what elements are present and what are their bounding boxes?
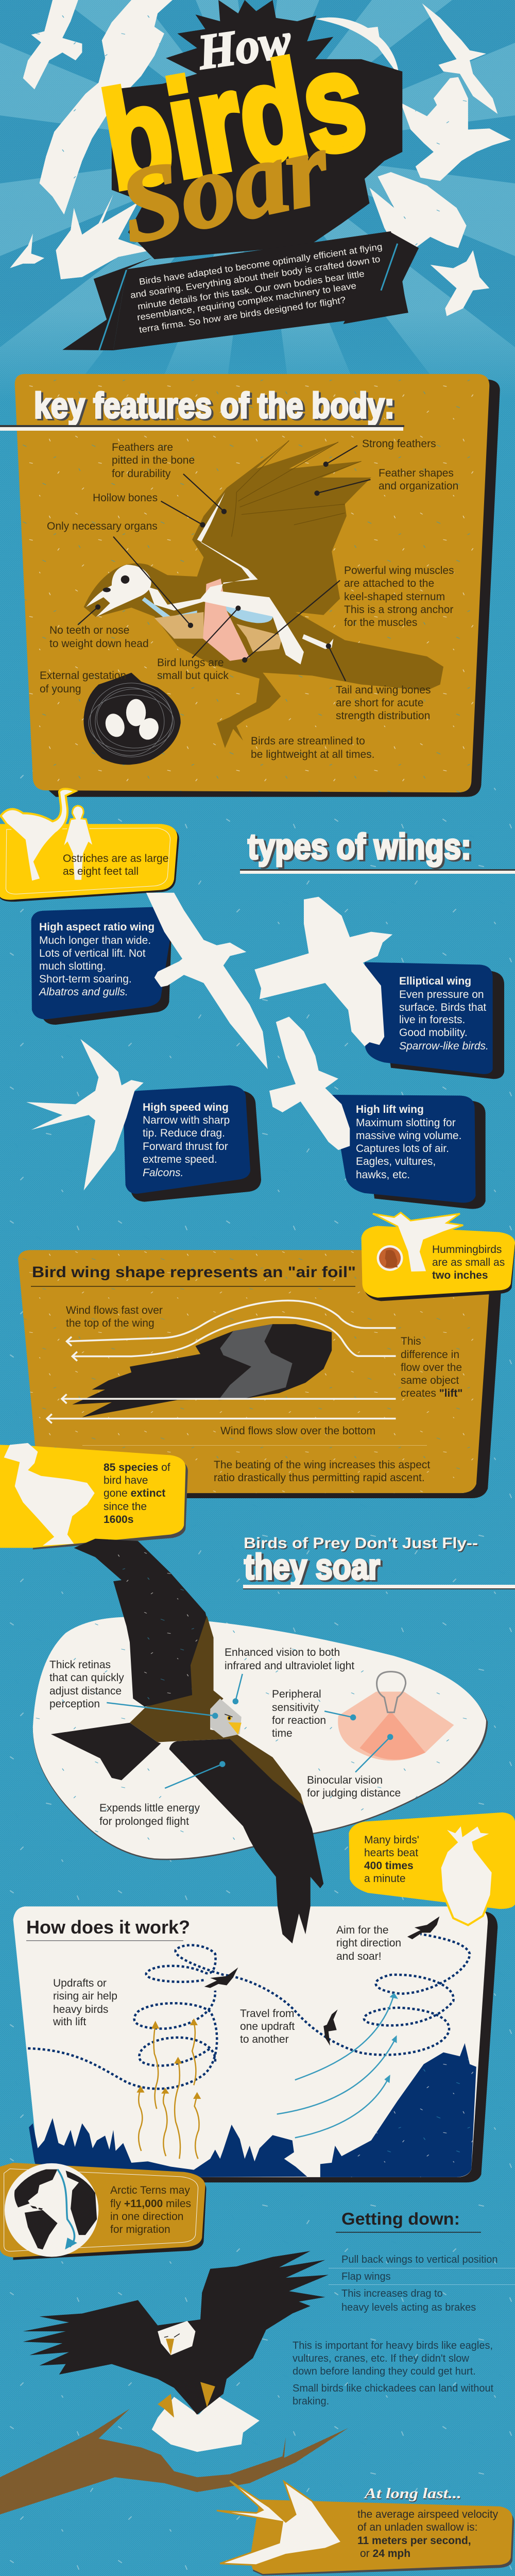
panel: getting down: heavy levels acting as brakes <box>341 2302 476 2313</box>
labels: The beating of the wing increases this aspect <box>214 1459 430 1471</box>
icon: nest with eggs <box>83 673 181 765</box>
labels: Aim for the <box>336 1924 389 1936</box>
heading: types of wings: types of wings: <box>248 826 471 867</box>
labels: ratio drastically thus permitting rapid ascent. <box>214 1472 425 1484</box>
panel: high speed wing: Narrow with sharp <box>143 1114 230 1126</box>
panel: high aspect ratio wing: Much longer than wide. <box>39 935 151 946</box>
labels: Wind flows slow over the bottom <box>220 1425 375 1437</box>
labels: perception <box>49 1698 100 1710</box>
panel: high lift wing: Captures lots of air. <box>356 1143 449 1155</box>
heading: Bird wing shape represents an "air foil" <box>32 1264 356 1281</box>
labels: pitted in the bone <box>112 454 195 466</box>
illustration: bird anatomy <box>84 440 443 748</box>
labels <box>53 1924 401 2045</box>
callout: dodo extinct species <box>0 1443 188 1550</box>
labels: Birds are streamlined to <box>251 735 365 747</box>
labels: the top of the wing <box>66 1317 154 1329</box>
labels: for prolonged flight <box>99 1816 189 1827</box>
icon: dodo <box>4 1443 95 1546</box>
ribbon: intro text: Birds have adapted to become optimally efficient at flying <box>139 241 383 287</box>
labels: infrared and ultraviolet light <box>225 1660 354 1672</box>
labels: creates "lift" <box>401 1387 462 1399</box>
labels <box>49 1647 401 1827</box>
panel: high lift wing: High lift wing <box>356 1104 424 1115</box>
ribbon: intro text <box>62 231 419 350</box>
callout: ostriches: as eight feet tall <box>63 866 139 877</box>
heading: birds of prey: they soar <box>244 1547 380 1587</box>
icon: vision cones <box>338 1691 454 1760</box>
sparrow-like bird <box>254 897 392 1046</box>
panel: elliptical wing: Even pressure on <box>399 989 484 1001</box>
callout: dodo extinct species: gone extinct <box>104 1487 165 1499</box>
ribbon: intro text: and soaring. Everything about their body is crafted down to <box>130 253 381 300</box>
small black birds <box>204 1917 439 2046</box>
labels: Feathers are <box>112 442 173 453</box>
panel: getting down <box>293 2209 515 2407</box>
callout: arctic terns: for migration <box>110 2224 170 2235</box>
labels: heavy birds <box>53 2004 108 2015</box>
panel: elliptical wing: surface. Birds that <box>399 1002 486 1013</box>
callout: hummingbirds <box>362 1213 515 1301</box>
heading: Getting down: <box>341 2209 460 2228</box>
labels: Bird lungs are <box>157 657 224 669</box>
heading: key features of the body: <box>34 385 394 426</box>
labels <box>66 1304 462 1484</box>
labels: adjust distance <box>49 1685 122 1697</box>
pointer lines <box>78 446 370 681</box>
labels: that can quickly <box>49 1672 124 1684</box>
high lift bird <box>269 1016 350 1150</box>
labels: Enhanced vision to both <box>225 1647 340 1658</box>
labels: and soar! <box>336 1951 382 1962</box>
panel: high aspect ratio wing: Albatros and gulls. <box>38 986 128 998</box>
panel: elliptical wing: Sparrow-like birds. <box>399 1040 489 1052</box>
heading: How does it work? <box>26 1917 190 1938</box>
ribbon: intro text: resemblance, requiring complex machinery to leave <box>136 280 357 323</box>
labels: Peripheral <box>272 1688 321 1700</box>
title: How birds Soar <box>93 0 402 266</box>
panel: high lift wing: Eagles, vultures, <box>356 1156 436 1167</box>
callout: arctic terns <box>0 2163 207 2260</box>
labels: to another <box>240 2033 289 2045</box>
landscape: trees and cliff <box>29 2118 307 2177</box>
panel: key features of the body <box>0 374 500 797</box>
illustration: tree branch <box>0 2409 348 2514</box>
callout: arctic terns: Arctic Terns may <box>110 2184 190 2196</box>
title word: birds: birds <box>93 22 375 218</box>
callout: arctic terns: fly +11,000 miles <box>110 2198 191 2210</box>
illustration: landing eagle <box>23 2251 329 2452</box>
labels: are attached to the <box>344 578 434 589</box>
pointer lines: senses <box>107 1674 393 1788</box>
panel: getting down: Small birds like chickadees can land without <box>293 2383 494 2394</box>
labels: time <box>272 1727 293 1739</box>
labels: Feather shapes <box>379 467 454 479</box>
albatross <box>146 893 268 1069</box>
icon: swallow <box>217 2481 341 2565</box>
callout: ostriches <box>0 789 179 902</box>
labels: difference in <box>401 1349 459 1361</box>
callout: heart rate: 400 times <box>364 1860 414 1872</box>
panel: getting down: down before landing they could get hurt. <box>293 2366 476 2377</box>
panel: high speed wing: tip. Reduce drag. <box>143 1127 225 1139</box>
panel: how does it work <box>13 1906 497 2182</box>
labels: one updraft <box>240 2021 295 2032</box>
ribbon: intro text: minute details for this task. Our own bodies bear little <box>137 268 365 312</box>
labels: This <box>401 1335 421 1347</box>
icon: globe with migration route <box>5 2163 98 2257</box>
rising updraft arrows <box>139 2022 199 2159</box>
title backdrop: black crown and block shadow <box>112 0 402 259</box>
labels: Hollow bones <box>93 492 158 504</box>
callout: dodo extinct species: 85 species of <box>104 1462 170 1473</box>
labels: flow over the <box>401 1362 462 1374</box>
labels: External gestation <box>40 670 126 682</box>
labels: Wind flows fast over <box>66 1304 163 1316</box>
panel: air foil <box>18 1250 501 1498</box>
labels: Expends little energy <box>99 1802 200 1814</box>
callout: dodo extinct species: since the <box>104 1501 147 1513</box>
labels: Only necessary organs <box>47 520 158 532</box>
panel: high lift wing: massive wing volume. <box>356 1130 461 1142</box>
panel: getting down: braking. <box>293 2396 329 2407</box>
labels: Powerful wing muscles <box>344 565 454 577</box>
panel: high aspect ratio wing: Lots of vertical lift. Not <box>39 947 146 959</box>
labels: and organization <box>379 480 458 492</box>
callout: dodo extinct species: 1600s <box>104 1514 133 1526</box>
falcon swallow shape <box>26 1039 144 1191</box>
panel: bird of prey senses <box>33 1617 488 1860</box>
labels: Strong feathers <box>362 438 436 450</box>
labels: to weight down head <box>49 638 149 650</box>
callout: hummingbirds: are as small as <box>432 1257 505 1268</box>
panel: high aspect ratio wing: Short-term soaring. <box>39 973 132 985</box>
callout: dodo extinct species: bird have <box>104 1475 148 1486</box>
labels: same object <box>401 1375 459 1386</box>
panel: elliptical wing: Good mobility. <box>399 1027 468 1039</box>
panel: elliptical wing: Elliptical wing <box>399 975 471 987</box>
labels: Binocular vision <box>307 1774 383 1786</box>
labels: of young <box>40 683 81 695</box>
panel: high speed wing: Falcons. <box>143 1167 183 1179</box>
labels: are short for acute <box>336 697 423 709</box>
panel: getting down: This is important for heavy birds like eagles, <box>293 2340 493 2351</box>
callout: at long last swallow: At long last... <box>364 2485 461 2502</box>
callout: heart rate: Many birds' <box>364 1834 419 1846</box>
illustration: wing cross-section <box>72 1324 332 1417</box>
panel: high speed wing: Forward thrust for <box>143 1141 228 1153</box>
callout: heart rate: a minute <box>364 1873 406 1885</box>
callout: hummingbirds: Hummingbirds <box>432 1244 502 1256</box>
panel: high aspect ratio wing: much slotting. <box>39 960 106 972</box>
panel background <box>15 374 500 797</box>
callout: hummingbirds: two inches <box>432 1269 488 1281</box>
panel: elliptical wing <box>365 962 504 1079</box>
labels: small but quick <box>157 670 229 682</box>
panel: high aspect ratio wing <box>31 907 171 1025</box>
labels: for judging distance <box>307 1787 401 1799</box>
panel: high speed wing <box>123 1086 261 1202</box>
icon: heart <box>440 1824 493 1925</box>
labels: for durability <box>112 468 171 480</box>
callout: ostriches: Ostriches are as large <box>63 853 168 865</box>
decorative white bird silhouettes <box>10 0 511 316</box>
panel: getting down: Flap wings <box>341 2271 391 2282</box>
callout: heart rate <box>349 1812 515 1925</box>
panel: getting down: This increases drag to <box>341 2288 443 2299</box>
panel: high speed wing: extreme speed. <box>143 1154 217 1165</box>
callout: heart rate: hearts beat <box>364 1847 418 1859</box>
illustration: soaring eagle <box>51 1539 323 1943</box>
labels: This is a strong anchor <box>344 604 453 616</box>
airflow lines and arrows <box>47 1300 396 1423</box>
icon: penny <box>377 1245 403 1271</box>
wind arrows <box>277 1997 395 2138</box>
labels: No teeth or nose <box>49 624 129 636</box>
heading: birds of prey: Birds of Prey Don't Just Fly-- <box>244 1535 478 1552</box>
labels: keel-shaped sternum <box>344 591 445 603</box>
labels: for reaction <box>272 1715 326 1726</box>
callout: at long last swallow: 11 meters per second, <box>357 2535 471 2547</box>
heading: birds of prey <box>243 1535 515 1589</box>
icon: human figure <box>62 806 94 880</box>
labels: with lift <box>53 2016 86 2028</box>
panel: getting down: vultures, cranes, etc. If they didn't slow <box>293 2353 469 2364</box>
flight path dotted <box>28 1934 470 2089</box>
callout: at long last swallow: the average airspeed velocity <box>357 2509 499 2520</box>
panel: getting down: Pull back wings to vertical position <box>341 2254 497 2265</box>
panel: high lift wing: Maximum slotting for <box>356 1117 456 1129</box>
labels: Travel from <box>240 2008 294 2020</box>
labels: right direction <box>336 1937 401 1949</box>
labels <box>40 438 458 760</box>
labels: sensitivity <box>272 1702 319 1714</box>
icon: ostrich <box>1 789 76 882</box>
callout: at long last swallow <box>217 2481 514 2575</box>
title word: Soar: Soar <box>110 108 340 266</box>
labels: be lightweight at all times. <box>251 749 374 760</box>
labels: strength distribution <box>336 710 430 722</box>
labels: Updrafts or <box>53 1977 107 1989</box>
panel: high lift wing: hawks, etc. <box>356 1169 410 1181</box>
panel: high speed wing: High speed wing <box>143 1101 229 1113</box>
white wing-type bird silhouettes <box>26 893 392 1191</box>
labels: for the muscles <box>344 617 417 629</box>
panel: high lift wing <box>332 1095 486 1209</box>
title word: How: How <box>194 12 295 80</box>
ribbon: intro text: terra firma. So how are birds designed for flight? <box>139 295 347 335</box>
panel: elliptical wing: live in forests. <box>399 1014 465 1026</box>
labels: rising air help <box>53 1990 117 2002</box>
panel: high aspect ratio wing: High aspect ratio wing <box>39 921 154 933</box>
labels: Tail and wing bones <box>336 684 431 696</box>
icon: hummingbird <box>373 1213 463 1273</box>
labels: Thick retinas <box>49 1659 111 1671</box>
callout: at long last swallow: or 24 mph <box>360 2548 410 2560</box>
callout: arctic terns: in one direction <box>110 2211 183 2223</box>
callout: at long last swallow: of an unladen swallow is: <box>357 2521 477 2533</box>
